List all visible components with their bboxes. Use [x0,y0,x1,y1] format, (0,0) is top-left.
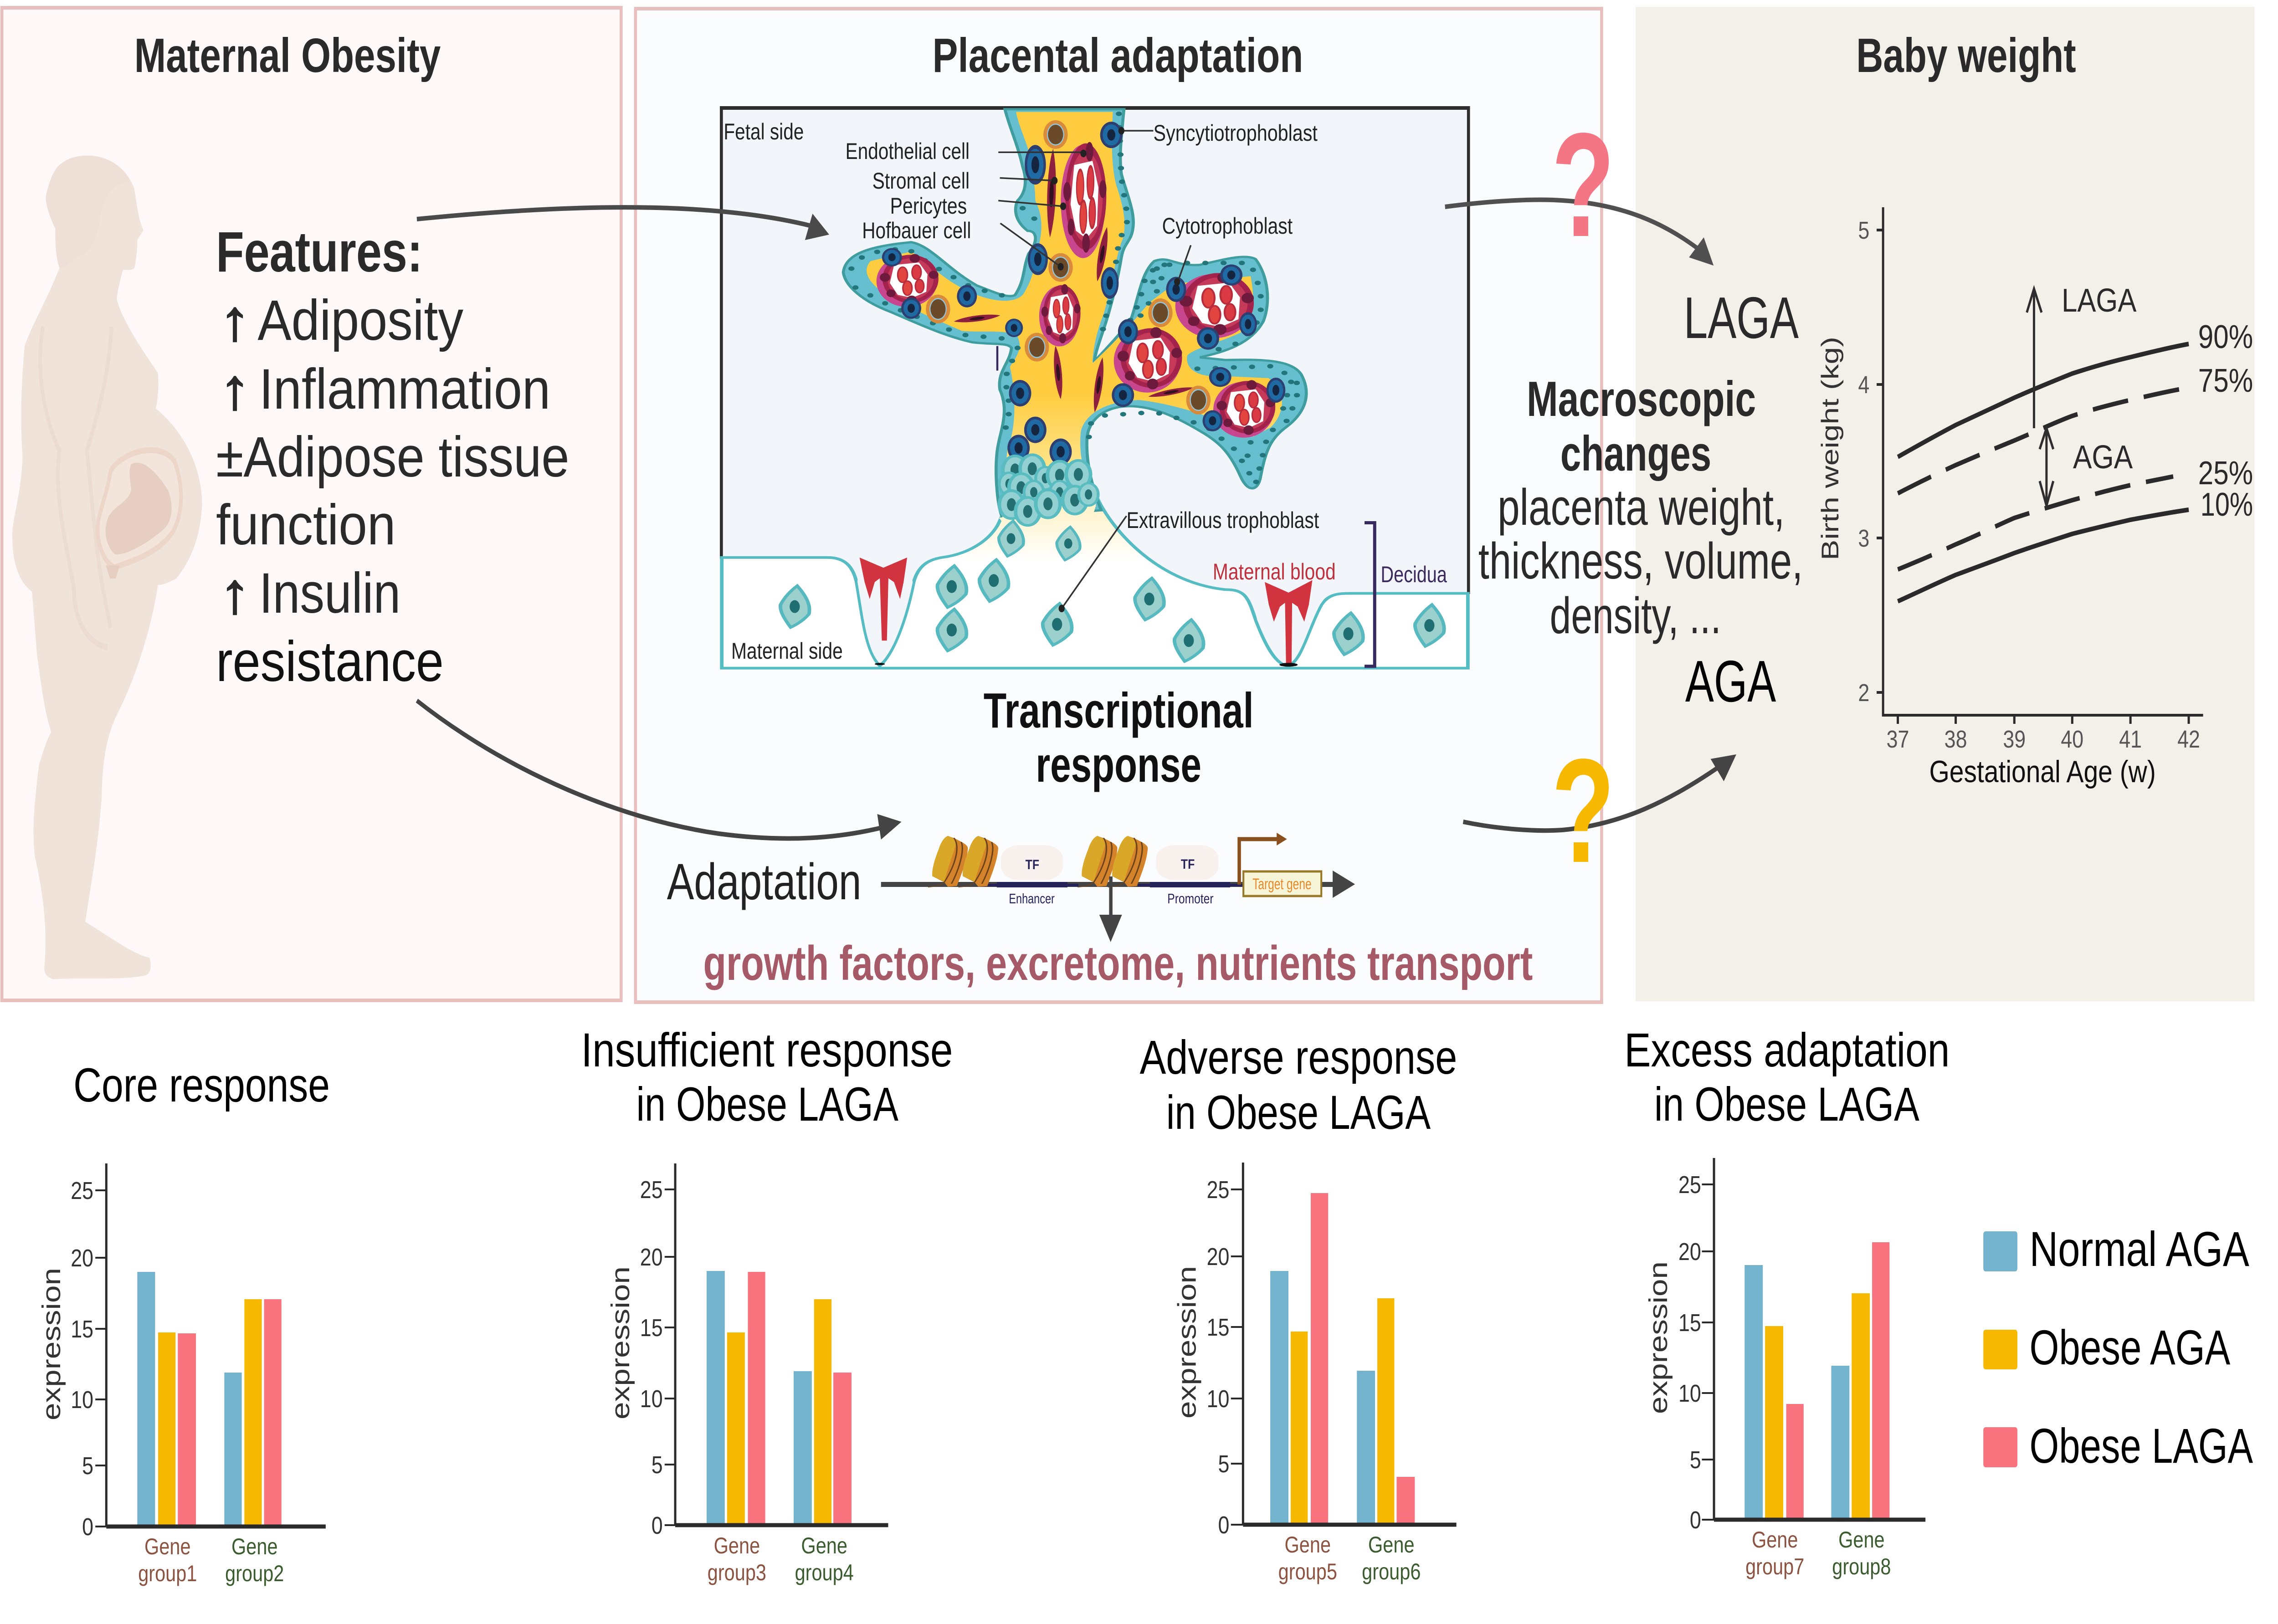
bar chart: insufficient response: 20 [640,1243,663,1271]
label: AGA: AGA [1685,649,1776,714]
stroma [867,112,1282,518]
bar chart: excess adaptation: 20 [1678,1238,1701,1265]
bar chart: insufficient response: 10 [640,1385,663,1413]
icon: transcription start arrow [1239,833,1287,885]
decidua bracket [1365,523,1375,666]
chart: birth weight percentiles: 3 [1858,524,1869,552]
heading: transcriptional response: Transcriptional [984,683,1254,738]
chart: birth weight percentiles: 2 [1858,679,1869,707]
title: insufficient response: Insufficient response [581,1024,953,1077]
heading: placental adaptation: Placental adaptation [933,28,1303,82]
text block: macroscopic changes: thickness, volume, [1478,533,1803,589]
bar chart: adverse response: expression [1173,1266,1201,1419]
trophoblast dots [852,114,1300,484]
bar chart: excess adaptation: 10 [1678,1379,1701,1407]
label: LAGA: LAGA [1684,286,1799,351]
chart labels [2062,282,2253,523]
text: growth factors: growth factors, excretome, nutrients transport [703,936,1533,990]
villous tree [843,109,1306,518]
title: excess adaptation: Excess adaptation [1624,1024,1950,1077]
bar chart: insufficient response: group3 [708,1559,766,1585]
bar chart: adverse response: 15 [1207,1313,1229,1341]
bar chart: adverse response: Gene [1368,1532,1415,1557]
chart: birth weight percentiles: Gestational Age (w) [1929,754,2156,789]
bar chart: insufficient response [606,1163,888,1585]
arrow: transcription to AGA [1463,754,1736,830]
text block: macroscopic changes: placenta weight, [1498,479,1785,536]
bar chart: excess adaptation: 15 [1678,1309,1701,1337]
bar chart: excess adaptation: group7 [1745,1553,1804,1579]
gene regulation diagram [881,833,1355,942]
chart: birth weight percentiles: 41 [2119,725,2142,753]
label: adaptation: Adaptation [667,853,862,910]
extravillous trophoblasts [780,521,1444,661]
capillaries [1060,139,1107,260]
bar chart: excess adaptation: expression [1644,1261,1673,1414]
arrow: down to products [1099,876,1122,942]
gene regulation diagram: Enhancer [1009,891,1055,907]
placenta labels: Endothelial cell [846,138,970,164]
bar chart: insufficient response: 15 [640,1314,663,1342]
target gene box: Target gene [1252,876,1312,893]
chart labels: 25% [2198,455,2253,492]
legend: Obese AGA [2029,1320,2230,1375]
title: core response: Core response [73,1059,330,1112]
bar chart: excess adaptation: 25 [1678,1171,1701,1199]
bar chart: core response: 10 [71,1386,93,1414]
bar chart: insufficient response: expression [606,1266,635,1419]
arrow: LAGA range [2027,289,2042,428]
bar chart: core response: 5 [82,1452,93,1480]
text block: features list: ↑ [220,289,251,352]
arrow: features to transcription [417,701,902,840]
text block: features list: Insulin [259,562,400,625]
bar chart: insufficient response: 0 [652,1511,663,1539]
bar chart: adverse response [1173,1163,1457,1584]
placenta labels: Stromal cell [872,168,970,194]
chart: birth weight percentiles: 42 [2177,725,2200,753]
bar chart: core response: 20 [71,1244,93,1272]
title: adverse response [1140,1031,1457,1139]
text block: features list: Adiposity [257,289,464,352]
placenta labels: Fetal side [723,118,804,144]
percentile curves [1898,344,2189,601]
stromal cells [1046,148,1057,238]
heading: transcriptional response [984,683,1254,793]
spiral arteries [860,558,1313,663]
chart: birth weight percentiles [1817,207,2253,789]
bar chart: insufficient response: group4 [795,1559,854,1585]
bar chart: insufficient response: Gene [714,1532,760,1558]
chart labels: 90% [2198,319,2253,355]
chart: birth weight percentiles: 4 [1858,371,1869,399]
bar chart: adverse response: 0 [1218,1511,1229,1539]
chart labels: AGA [2073,439,2133,476]
placenta labels [723,118,1447,664]
chart: birth weight percentiles: 5 [1858,216,1869,244]
text block: features list: ±Adipose tissue [216,425,570,489]
title: adverse response: in Obese LAGA [1166,1086,1431,1139]
bar chart: adverse response: Gene [1285,1532,1331,1557]
leader dots [1052,127,1180,612]
chart labels: LAGA [2062,282,2136,319]
chart: birth weight percentiles: 38 [1945,725,1967,753]
icon: yellow question mark: ? [1551,728,1615,894]
text block: features list: resistance [216,630,444,693]
legend: Obese LAGA [2029,1419,2253,1474]
bar chart: core response: 0 [82,1513,93,1541]
chart: birth weight percentiles: 37 [1887,725,1909,753]
arrow: AGA range [2040,428,2053,506]
bar chart: excess adaptation: Gene [1752,1527,1798,1552]
title: excess adaptation: in Obese LAGA [1654,1078,1919,1131]
bar chart: core response: 25 [71,1177,93,1204]
bar chart: adverse response: 25 [1207,1176,1229,1204]
icon: pink question mark: ? [1551,102,1615,268]
title: insufficient response: in Obese LAGA [636,1078,898,1131]
chart: birth weight percentiles: Birth weight (kg) [1817,337,1844,560]
cytotrophoblast column [999,455,1098,525]
text block: macroscopic changes: changes [1560,426,1711,482]
text block: macroscopic changes: density, ... [1550,587,1721,644]
heading: transcriptional response: response [1036,737,1201,793]
bar chart: adverse response: group6 [1362,1558,1421,1584]
arrow: placenta to LAGA [1445,200,1714,266]
chart: birth weight percentiles: 40 [2061,725,2083,753]
placenta illustration [721,108,1468,669]
panel: maternal obesity [2,8,621,1000]
macrophages [1043,120,1068,149]
bar chart: core response: group2 [225,1560,284,1586]
placenta labels: Pericytes [890,193,967,219]
bar chart: core response: 15 [71,1315,93,1343]
placenta labels: Maternal side [731,638,843,664]
gene regulation diagram: Promoter [1167,891,1214,907]
bar chart: insufficient response: Gene [801,1532,847,1558]
bar chart: core response: expression [37,1268,66,1420]
heading: baby weight: Baby weight [1856,28,2076,82]
bar chart: adverse response: 5 [1218,1450,1229,1478]
title: insufficient response [581,1024,953,1131]
bar chart: core response: group1 [138,1560,197,1586]
text block: features list: Inflammation [259,358,550,421]
arrow: features to placenta [417,207,829,240]
bar chart: insufficient response: 25 [640,1176,663,1204]
gene regulation diagram: TF [1181,856,1195,872]
text block: features list: ↑ [220,358,251,421]
placenta labels: Extravillous trophoblast [1127,507,1319,533]
text block: features list: ↑ [220,562,251,625]
heading: maternal obesity: Maternal Obesity [134,28,441,82]
maternal tissue [722,495,1468,668]
placenta labels: Hofbauer cell [862,217,971,243]
gene regulation diagram: TF [1026,857,1039,872]
bar chart: adverse response: 10 [1207,1385,1229,1413]
bar chart: excess adaptation: Gene [1838,1527,1885,1552]
bar chart: excess adaptation: group8 [1832,1553,1891,1579]
text block: features list: function [216,493,395,557]
legend: Normal AGA [2029,1222,2249,1277]
text block: macroscopic changes [1478,371,1803,644]
icon: pregnant woman silhouette [12,156,202,979]
placenta labels: Syncytiotrophoblast [1154,120,1318,146]
bar chart: insufficient response: 5 [652,1451,663,1479]
text block: macroscopic changes: Macroscopic [1527,371,1756,427]
target gene box [1243,871,1321,896]
title: adverse response: Adverse response [1140,1031,1457,1084]
chart labels: 75% [2198,363,2253,399]
bar chart: excess adaptation: 0 [1690,1506,1701,1534]
panel: placental adaptation [636,9,1601,1002]
bar chart: core response: Gene [144,1533,191,1559]
bar chart: excess adaptation: 5 [1690,1446,1701,1474]
chart labels: 10% [2201,487,2253,523]
bar chart: core response: Gene [231,1533,278,1559]
placenta labels: Decidua [1381,561,1447,587]
placenta labels: Cytotrophoblast [1162,213,1293,239]
bar chart: adverse response: group5 [1278,1558,1337,1584]
text block: features list: Features: [216,220,422,284]
bar chart: adverse response: 20 [1207,1243,1229,1271]
bar chart: excess adaptation [1644,1158,1925,1579]
chart: birth weight percentiles: 39 [2003,725,2026,753]
text block: features list [216,220,570,693]
syncytiotrophoblast nuclei [1100,122,1123,148]
placenta labels: Maternal blood [1213,558,1336,584]
panel: baby weight [1636,7,2255,1001]
bar chart: core response [37,1163,326,1586]
leader lines [998,131,1191,609]
legend [1983,1222,2253,1474]
title: excess adaptation [1624,1024,1950,1131]
